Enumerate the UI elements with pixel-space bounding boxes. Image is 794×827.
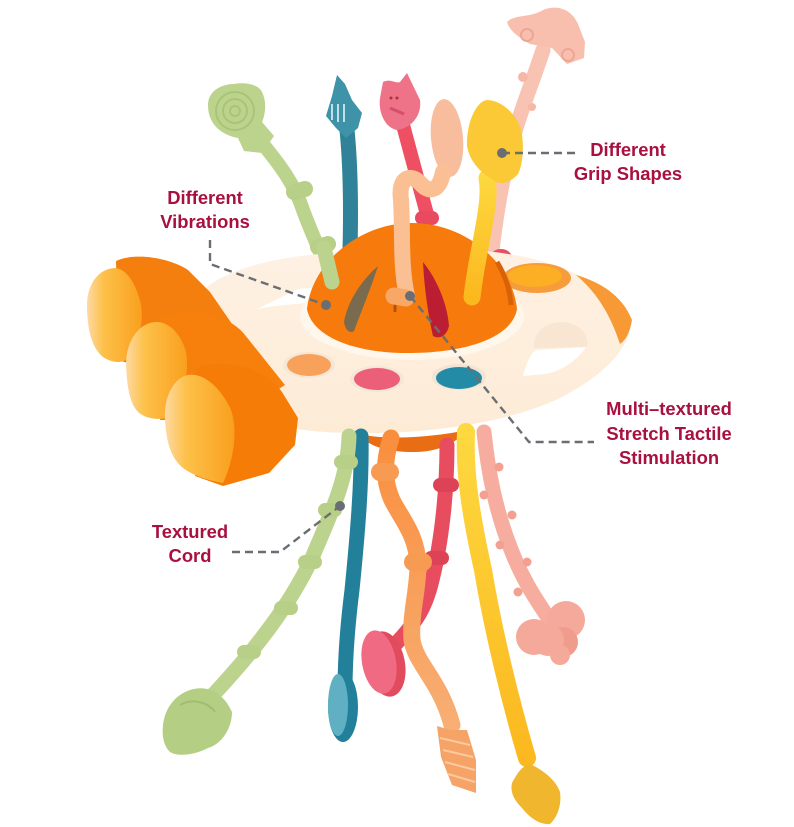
button: orange [283, 352, 335, 378]
label: multi-textured stretch tactile stimulation: Multi–textured [606, 398, 732, 419]
cord: orange with leaf [380, 438, 476, 793]
cord: pink with car teether [492, 8, 585, 250]
slot: right small [497, 262, 511, 305]
upper cords and teethers [208, 8, 585, 285]
label: multi-textured stretch tactile stimulation: Stimulation [619, 447, 719, 468]
label: different vibrations: Different [167, 187, 243, 208]
label: textured cord: Cord [169, 545, 211, 566]
teether: peach oval [428, 98, 466, 178]
cord: teal with citrus [328, 436, 361, 742]
button: top right [503, 263, 571, 293]
slot: left [344, 266, 378, 332]
saucer disc [200, 248, 630, 433]
label: different grip shapes [497, 139, 682, 184]
teether: yellow cheese [467, 100, 523, 183]
cord: peach through dome [401, 172, 443, 296]
lower cords and teethers [163, 430, 585, 824]
under dome [358, 430, 467, 452]
label: different vibrations [160, 187, 331, 310]
cord: green with round teether [208, 83, 331, 285]
button: pink [350, 366, 404, 392]
label: multi-textured stretch tactile stimulation [405, 291, 732, 468]
cord stub: green [324, 248, 332, 282]
hole shadow [534, 322, 587, 348]
label: textured cord [152, 501, 345, 566]
dome shell [307, 223, 517, 353]
cord: red with disk [357, 445, 452, 700]
label: different grip shapes: Grip Shapes [574, 163, 682, 184]
label: multi-textured stretch tactile stimulation: Stretch Tactile [606, 423, 732, 444]
saucer rear red knob [490, 249, 512, 267]
orange tip [576, 275, 632, 344]
dome [300, 100, 524, 360]
cord: green with strawberry [163, 436, 351, 755]
cord: red with pink teether [380, 73, 432, 218]
rocket: middle [126, 312, 285, 420]
label: different vibrations: Vibrations [160, 211, 250, 232]
rockets [87, 257, 298, 486]
cord stub: yellow [472, 178, 488, 297]
cord: pink with flower [480, 432, 585, 665]
cord: yellow with strawberry [466, 432, 560, 824]
button: teal [432, 364, 486, 390]
dome rim [300, 272, 524, 360]
cord: teal with bird teether [326, 75, 362, 250]
slot: front middle [394, 302, 396, 312]
rocket: front [165, 364, 298, 486]
rocket: back [87, 257, 250, 370]
slot: right [423, 262, 449, 337]
toy body [200, 248, 632, 433]
label: textured cord: Textured [152, 521, 228, 542]
label: different grip shapes: Different [590, 139, 666, 160]
